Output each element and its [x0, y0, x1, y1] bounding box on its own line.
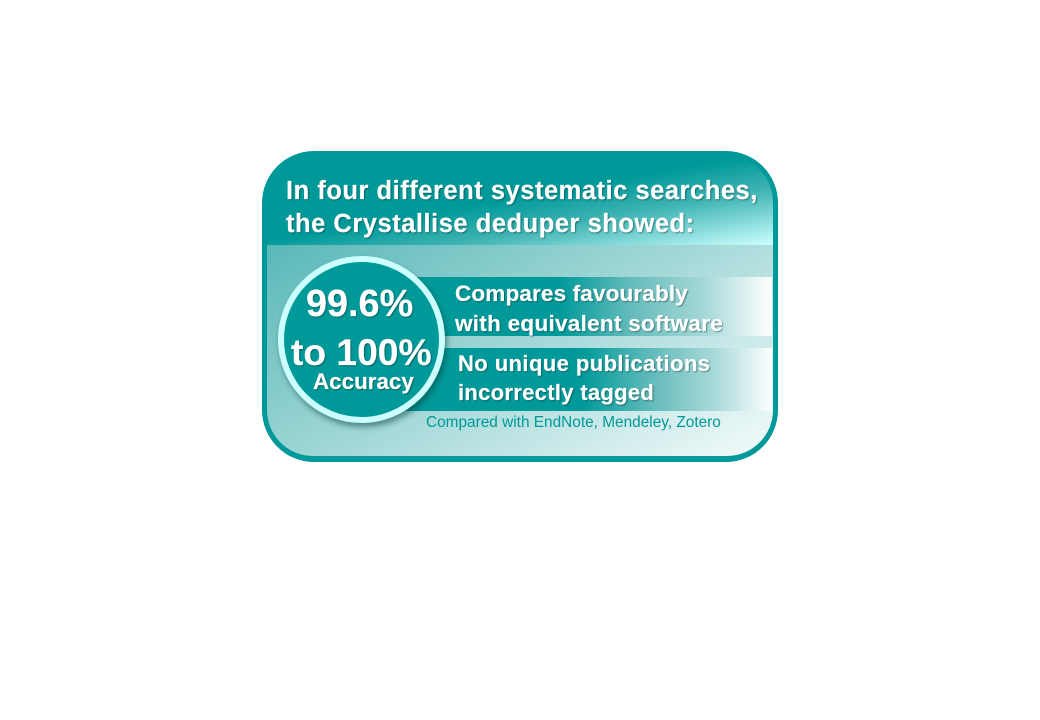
text: compares favourably [454, 281, 724, 338]
text: no unique publications: incorrectly tagged [458, 380, 654, 404]
bar: no unique publications [405, 348, 772, 411]
badge: accuracy circle [278, 256, 445, 423]
heading [286, 177, 758, 240]
panel: accuracy card [262, 151, 778, 462]
heading: In four different systematic searches, [286, 177, 758, 205]
text: no unique publications: No unique publications [458, 351, 710, 376]
footnote: Compared with EndNote, Mendeley, Zotero [426, 414, 721, 431]
panel: header gradient [267, 156, 773, 245]
text: to 100%: to 100% [291, 331, 432, 373]
text: no unique publications [458, 351, 711, 406]
text: compares favourably: Compares favourably [455, 281, 688, 306]
panel: card body gradient [267, 245, 773, 456]
bar: compares favourably [405, 277, 772, 336]
text: Accuracy: Accuracy [313, 369, 414, 394]
text: compares favourably: with equivalent software [455, 310, 723, 336]
text: 99.6%: 99.6% [306, 283, 413, 325]
heading: the Crystallise deduper showed: [286, 210, 695, 238]
